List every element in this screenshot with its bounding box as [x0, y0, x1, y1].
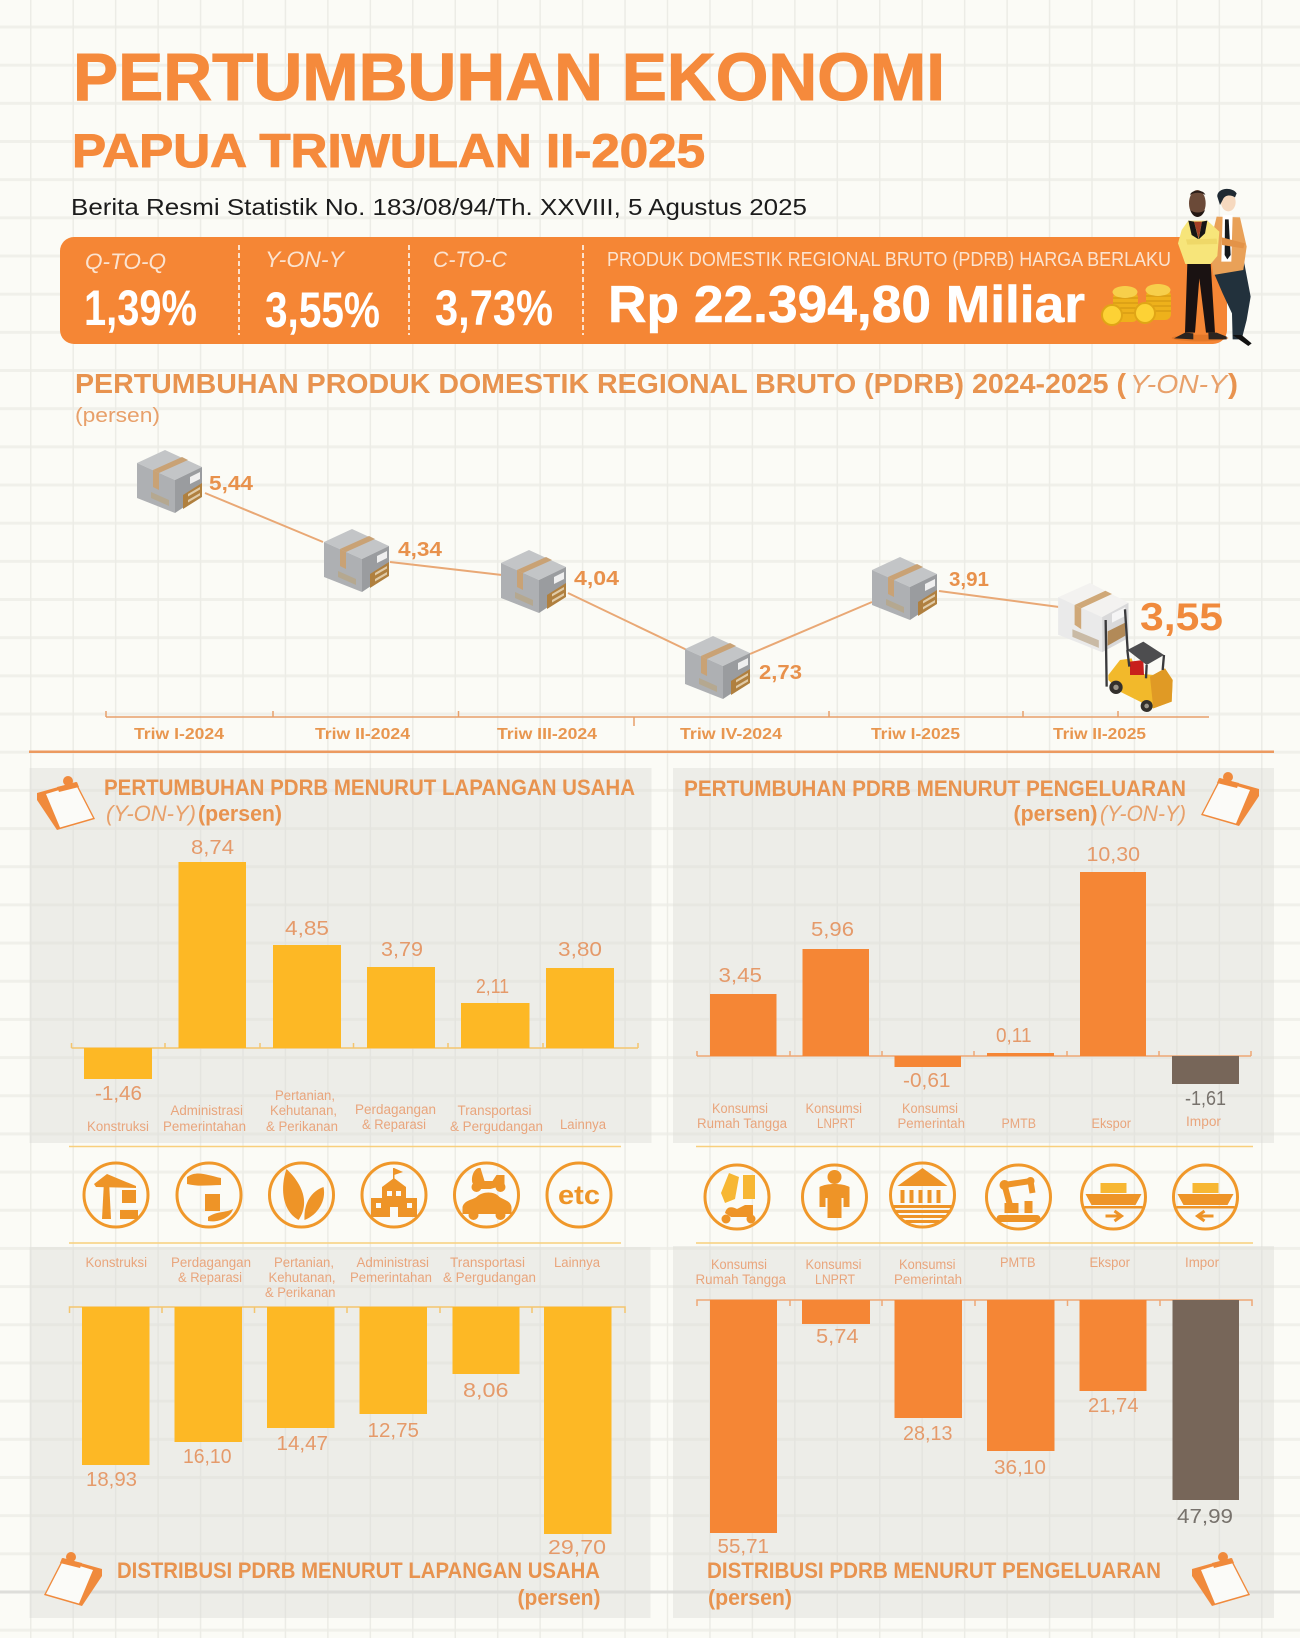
- bar: Konsumsi Rumah Tangga: Konsumsi: [711, 1257, 767, 1272]
- bar: Lainnya: 3,80: [558, 939, 602, 961]
- icon: white box: [1058, 583, 1128, 652]
- point: Triw I-2024: Triw I-2024: [134, 726, 224, 743]
- point: Triw II-2024: [315, 529, 443, 743]
- Y-on-Y indicator: [265, 247, 380, 338]
- bar: Transportasi & Pergudangan: Transportasi: [450, 1255, 525, 1270]
- icon: coins: [1102, 284, 1171, 325]
- bar: Pertanian, Kehutanan, & Perikanan: 14,47: [276, 1433, 328, 1455]
- bar chart: growth by industry: [72, 837, 638, 1134]
- Y-on-Y indicator: 3,55%: [265, 282, 380, 338]
- icon: clipboard: [37, 776, 95, 830]
- point: Triw II-2025 highlighted: Triw II-2025: [1053, 726, 1146, 743]
- title: PERTUMBUHAN EKONOMI: [73, 40, 945, 115]
- bar: Pertanian, Kehutanan, & Perikanan: Pertanian,: [275, 1088, 335, 1103]
- heading: growth by industry: PERTUMBUHAN PDRB MENURUT LAPANGAN USAHA: [104, 775, 635, 800]
- heading: growth by expenditure: [684, 776, 1186, 826]
- bar: Ekspor: 21,74: [1088, 1395, 1138, 1417]
- icon: trade hands: [177, 1163, 241, 1227]
- bar: PMTB: [987, 1255, 1054, 1479]
- bar: Pertanian, Kehutanan, & Perikanan: 4,85: [285, 918, 329, 940]
- icon: robot arm: [986, 1165, 1050, 1229]
- bar: Impor: [1172, 1056, 1239, 1129]
- point: Triw IV-2024: 2,73: [759, 662, 802, 684]
- bar: Transportasi & Pergudangan: [443, 1255, 536, 1402]
- point: Triw II-2025 highlighted: [1053, 583, 1223, 743]
- section heading: GRDP growth line chart: PERTUMBUHAN PRODUK DOMESTIK REGIONAL BRUTO (PDRB) 2024-2025 (: [75, 368, 1127, 399]
- bar chart: growth by expenditure: [697, 844, 1251, 1131]
- heading: growth by expenditure: PERTUMBUHAN PDRB MENURUT PENGELUARAN: [684, 776, 1186, 801]
- icon: import ship: [1174, 1165, 1238, 1229]
- GRDP current price: Rp 22.394,80 Miliar: [608, 276, 1085, 334]
- heading: growth by expenditure: (Y-ON-Y): [1100, 801, 1186, 826]
- bar: Konsumsi Pemerintah: Pemerintah: [898, 1116, 965, 1131]
- bar: Konsumsi Pemerintah: -0,61: [903, 1070, 950, 1092]
- bar: PMTB: 0,11: [996, 1025, 1032, 1047]
- bar: Lainnya: [546, 939, 614, 1132]
- bar: Impor: Impor: [1185, 1255, 1219, 1270]
- chart axis: [106, 711, 1209, 726]
- bar: Transportasi & Pergudangan: 8,06: [463, 1380, 508, 1402]
- bar: Perdagangan & Reparasi: 16,10: [183, 1446, 232, 1468]
- bar: Transportasi & Pergudangan: [450, 976, 543, 1134]
- bar: Konsumsi Pemerintah: Konsumsi: [899, 1257, 956, 1272]
- heading: growth by expenditure: (persen): [1014, 801, 1098, 826]
- bar: Konsumsi Pemerintah: [894, 1056, 965, 1131]
- publication reference: Berita Resmi Statistik No. 183/08/94/Th. XXVIII, 5 Agustus 2025: [71, 194, 807, 220]
- icon: food and scooter: [705, 1165, 769, 1229]
- bar: Konsumsi LNPRT: 5,74: [816, 1326, 858, 1348]
- point: Triw I-2025: Triw I-2025: [871, 726, 960, 743]
- bar: Pertanian, Kehutanan, & Perikanan: & Perikanan: [266, 1119, 338, 1134]
- bar: Konsumsi LNPRT: Konsumsi: [806, 1101, 862, 1116]
- point: Triw I-2024: 5,44: [209, 473, 254, 495]
- bar: Administrasi Pemerintahan: Administrasi: [356, 1255, 429, 1270]
- bar: Perdagangan & Reparasi: 3,79: [381, 939, 423, 961]
- icon: etc: etc: [558, 1180, 600, 1210]
- bar: Konstruksi: 18,93: [86, 1469, 137, 1491]
- bar: Konsumsi LNPRT: 5,96: [811, 919, 854, 941]
- bar: Konstruksi: Konstruksi: [86, 1255, 147, 1270]
- panel: growth by industry: [30, 768, 652, 1143]
- heading: growth by industry: (persen): [198, 801, 282, 826]
- icon: clipboard: [1201, 772, 1259, 826]
- bar: Konsumsi LNPRT: LNPRT: [815, 1272, 855, 1287]
- point: Triw I-2024: [134, 450, 254, 743]
- bar: Transportasi & Pergudangan: 2,11: [476, 976, 509, 998]
- bar: Administrasi Pemerintahan: [350, 1255, 432, 1442]
- heading: growth by industry: [104, 775, 635, 826]
- icon: scooter and car: [454, 1163, 518, 1227]
- bar chart: distribution by industry: [70, 1255, 625, 1559]
- bar: Konsumsi LNPRT: Konsumsi: [806, 1257, 862, 1272]
- section heading: GRDP growth line chart: ): [1228, 368, 1238, 399]
- bar: Impor: 47,99: [1177, 1506, 1233, 1528]
- bar: Perdagangan & Reparasi: & Reparasi: [362, 1117, 426, 1132]
- bar: Lainnya: Lainnya: [554, 1255, 600, 1270]
- bar: Konstruksi: Konstruksi: [87, 1119, 149, 1134]
- bar: Konsumsi LNPRT: LNPRT: [817, 1116, 855, 1131]
- bar: Perdagangan & Reparasi: [171, 1255, 251, 1468]
- line chart: GRDP growth 2024-2025: [106, 450, 1223, 743]
- bar: Administrasi Pemerintahan: Pemerintahan: [350, 1270, 432, 1285]
- bar: Konsumsi Rumah Tangga: [696, 1257, 786, 1558]
- point: Triw III-2024: 4,04: [574, 568, 620, 590]
- bar: Administrasi Pemerintahan: Administrasi: [170, 1103, 243, 1118]
- heading: distribution by industry: DISTRIBUSI PDRB MENURUT LAPANGAN USAHA: [117, 1558, 600, 1583]
- Q-to-Q indicator: [84, 249, 197, 336]
- bar: Pertanian, Kehutanan, & Perikanan: [265, 1255, 336, 1455]
- bar: Perdagangan & Reparasi: Perdagangan: [355, 1102, 436, 1117]
- bar: Pertanian, Kehutanan, & Perikanan: Kehutanan,: [270, 1103, 337, 1118]
- panel: growth by expenditure: [673, 768, 1274, 1143]
- bar: PMTB: PMTB: [1000, 1255, 1036, 1270]
- bar: Administrasi Pemerintahan: [163, 837, 246, 1134]
- C-to-C indicator: 3,73%: [435, 280, 553, 336]
- icon: construction crane: [84, 1163, 148, 1227]
- bar: Transportasi & Pergudangan: Transportasi: [458, 1103, 532, 1118]
- Q-to-Q indicator: 1,39%: [84, 280, 197, 336]
- panel: distribution by expenditure: [673, 1246, 1274, 1618]
- heading: growth by industry: (Y-ON-Y): [106, 801, 196, 826]
- bar: Pertanian, Kehutanan, & Perikanan: & Perikanan: [265, 1285, 336, 1300]
- point: Triw II-2024: Triw II-2024: [315, 726, 410, 743]
- bar: Pertanian, Kehutanan, & Perikanan: Kehutanan,: [268, 1270, 336, 1285]
- subtitle: PAPUA TRIWULAN II-2025: [72, 124, 705, 177]
- section heading: GRDP growth line chart: (persen): [75, 405, 160, 427]
- bar: Administrasi Pemerintahan: 12,75: [368, 1420, 419, 1442]
- bar: Impor: Impor: [1186, 1114, 1222, 1129]
- bar: Transportasi & Pergudangan: & Pergudangan: [443, 1270, 536, 1285]
- bar: Ekspor: 10,30: [1086, 844, 1140, 866]
- icon: government building: [362, 1163, 426, 1227]
- Q-to-Q indicator: Q-TO-Q: [85, 249, 166, 274]
- bar: Ekspor: Ekspor: [1090, 1255, 1130, 1270]
- bar: Konsumsi LNPRT: [802, 1257, 870, 1348]
- point: Triw II-2024: 4,34: [398, 539, 443, 561]
- heading: distribution by expenditure: DISTRIBUSI PDRB MENURUT PENGELUARAN: [707, 1558, 1161, 1583]
- bar: Konsumsi Pemerintah: Konsumsi: [902, 1101, 958, 1116]
- point: Triw III-2024: [497, 550, 620, 743]
- section heading: GRDP growth line chart: Y-ON-Y: [1130, 369, 1229, 399]
- section heading: GRDP growth line chart: [75, 368, 1238, 427]
- bar: Konsumsi Rumah Tangga: 55,71: [718, 1536, 769, 1558]
- bar: PMTB: PMTB: [1002, 1116, 1036, 1131]
- bar: Konsumsi Rumah Tangga: Konsumsi: [712, 1101, 768, 1116]
- bar: Konsumsi Rumah Tangga: 3,45: [718, 965, 762, 987]
- GRDP current price: PRODUK DOMESTIK REGIONAL BRUTO (PDRB) HARGA BERLAKU: [607, 249, 1171, 271]
- icon: person: [802, 1165, 866, 1229]
- bar: Konsumsi Rumah Tangga: Rumah Tangga: [696, 1272, 786, 1287]
- bar: Konstruksi: [84, 1048, 152, 1134]
- bar: Lainnya: [544, 1255, 612, 1559]
- heading: distribution by expenditure: [707, 1558, 1161, 1610]
- icon: government temple: [890, 1163, 954, 1227]
- panel: headline indicators: [60, 237, 1227, 344]
- point: Triw II-2025 highlighted: 3,55: [1140, 596, 1223, 639]
- panel: distribution by industry: [30, 1247, 650, 1618]
- icon: clipboard: [1192, 1552, 1250, 1606]
- icon: clipboard: [44, 1552, 102, 1606]
- point: Triw III-2024: Triw III-2024: [497, 726, 597, 743]
- icon: leaves: [270, 1163, 334, 1227]
- bar chart: distribution by expenditure: [696, 1255, 1252, 1558]
- icon: etc: [547, 1163, 611, 1227]
- bar: Konsumsi Pemerintah: 28,13: [903, 1423, 952, 1445]
- bar: Lainnya: Lainnya: [560, 1117, 606, 1132]
- bar: Impor: [1172, 1255, 1239, 1528]
- icon: two businessmen: [1172, 189, 1252, 346]
- bar: Lainnya: 29,70: [548, 1537, 606, 1559]
- heading: distribution by industry: [117, 1558, 600, 1610]
- bar: Perdagangan & Reparasi: & Reparasi: [178, 1270, 242, 1285]
- C-to-C indicator: [433, 247, 553, 336]
- bar: Pertanian, Kehutanan, & Perikanan: Pertanian,: [274, 1255, 334, 1270]
- bar: Konsumsi Pemerintah: [894, 1257, 962, 1445]
- GRDP current price: [607, 249, 1171, 334]
- heading: distribution by industry: (persen): [518, 1585, 600, 1610]
- bar: Konstruksi: -1,46: [95, 1083, 142, 1105]
- icon row: industries: [84, 1163, 611, 1227]
- bar: Konsumsi Pemerintah: Pemerintah: [894, 1272, 962, 1287]
- heading: distribution by expenditure: (persen): [708, 1585, 792, 1610]
- bar: PMTB: [987, 1025, 1054, 1131]
- point: Triw IV-2024: Triw IV-2024: [680, 726, 782, 743]
- bar: Perdagangan & Reparasi: [355, 939, 436, 1132]
- bar: Administrasi Pemerintahan: 8,74: [191, 837, 234, 859]
- bar: Ekspor: [1080, 844, 1146, 1131]
- icon: export ship: [1082, 1165, 1146, 1229]
- C-to-C indicator: C-TO-C: [433, 247, 507, 272]
- bar: PMTB: 36,10: [994, 1457, 1046, 1479]
- bar: Konsumsi LNPRT: [802, 919, 869, 1131]
- bar: Konstruksi: [82, 1255, 150, 1491]
- point: Triw I-2025: 3,91: [949, 569, 989, 591]
- icon row: expenditure: [705, 1163, 1238, 1229]
- Y-on-Y indicator: Y-ON-Y: [265, 247, 345, 272]
- bar: Pertanian, Kehutanan, & Perikanan: [266, 918, 341, 1134]
- bar: Administrasi Pemerintahan: Pemerintahan: [163, 1119, 246, 1134]
- icon: forklift: [1106, 609, 1173, 712]
- point: Triw IV-2024: [680, 636, 802, 743]
- bar: Konsumsi Rumah Tangga: [697, 965, 787, 1131]
- point: Triw I-2025: [871, 557, 989, 743]
- bar: Ekspor: [1080, 1255, 1146, 1417]
- bar: Transportasi & Pergudangan: & Pergudangan: [450, 1119, 543, 1134]
- bar: Konsumsi Rumah Tangga: Rumah Tangga: [697, 1116, 787, 1131]
- bar: Ekspor: Ekspor: [1092, 1116, 1131, 1131]
- bar: Perdagangan & Reparasi: Perdagangan: [171, 1255, 251, 1270]
- bar: Impor: -1,61: [1185, 1088, 1226, 1110]
